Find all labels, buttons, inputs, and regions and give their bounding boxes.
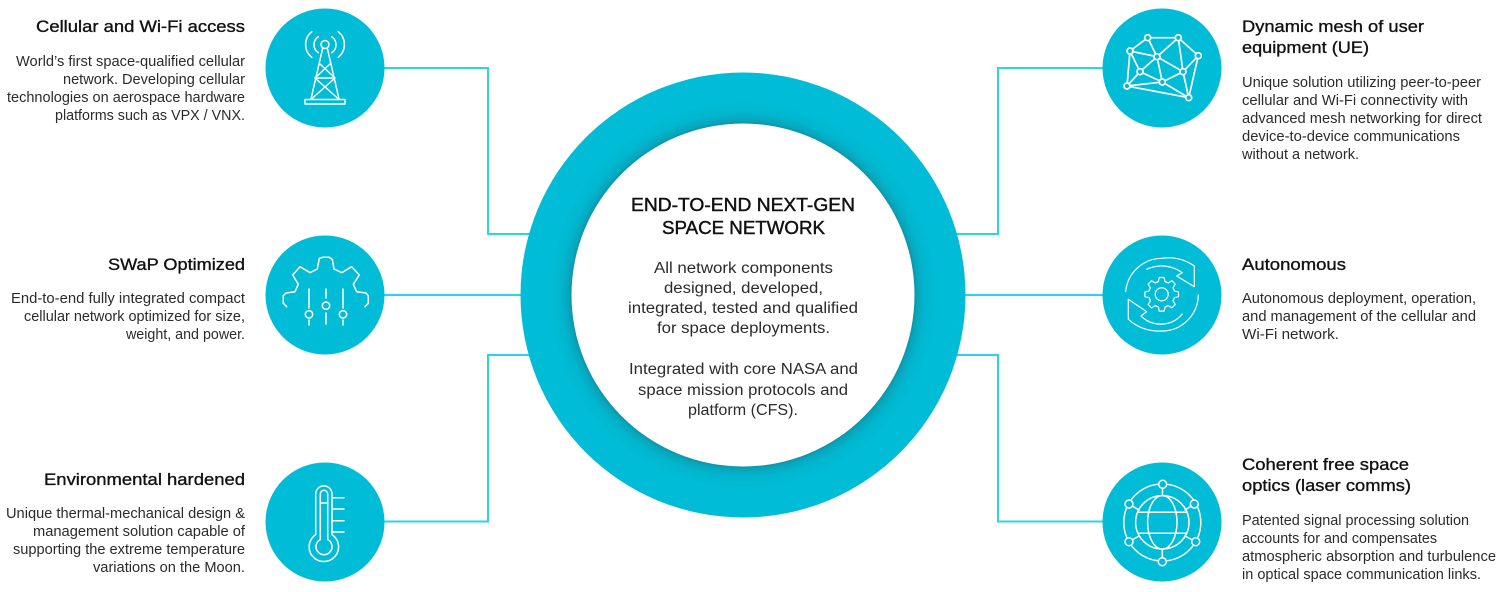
central paragraph 2 <box>629 361 858 419</box>
body: Dynamic mesh: Unique solution utilizing peer-to-peer <box>1242 75 1481 91</box>
body: Dynamic mesh: device-to-device communications <box>1242 129 1460 145</box>
body: Dynamic mesh: advanced mesh networking for direct <box>1242 111 1482 127</box>
body: SWaP Optimized <box>11 291 245 343</box>
central text <box>628 194 858 419</box>
heading: SWaP Optimized: SWaP Optimized <box>108 255 245 274</box>
icon: gear with sliders <box>266 236 384 354</box>
heading: Autonomous: Autonomous <box>1242 255 1346 274</box>
body: Coherent free space optics: Patented signal processing solution <box>1242 513 1469 529</box>
body: Coherent free space optics: atmospheric absorption and turbulence <box>1242 549 1496 565</box>
body: Cellular and Wi-Fi access: platforms such as VPX / VNX. <box>55 108 245 124</box>
heading: Cellular and Wi-Fi access: Cellular and Wi-Fi access <box>36 17 245 36</box>
body: Dynamic mesh: without a network. <box>1241 147 1359 163</box>
icon: cell tower <box>266 8 384 128</box>
icon: thermometer <box>266 462 384 582</box>
icon: mesh network <box>1102 8 1222 128</box>
icon: globe with orbit <box>1102 462 1222 582</box>
body: SWaP Optimized: cellular network optimized for size, <box>24 309 245 325</box>
heading: Dynamic mesh: Dynamic mesh of user <box>1242 17 1424 36</box>
central paragraph 2: space mission protocols and <box>638 382 848 399</box>
panel: Coherent free space optics text <box>1242 455 1496 583</box>
body: Environmental hardened <box>6 506 246 576</box>
body: Autonomous: Wi-Fi network. <box>1242 327 1339 343</box>
body: SWaP Optimized: weight, and power. <box>125 327 245 343</box>
panel: Environmental hardened text <box>6 470 246 576</box>
body: SWaP Optimized: End-to-end fully integrated compact <box>11 291 245 307</box>
body: Coherent free space optics: in optical space communication links. <box>1242 567 1481 583</box>
central heading: SPACE NETWORK <box>662 217 826 238</box>
body: Coherent free space optics <box>1242 513 1496 583</box>
central heading <box>631 194 855 238</box>
icon: cycle arrows with gear <box>1102 236 1222 354</box>
panel: Dynamic mesh text <box>1241 17 1482 163</box>
body: Cellular and Wi-Fi access <box>7 54 245 124</box>
central heading: END-TO-END NEXT-GEN <box>631 194 855 215</box>
central paragraph 1: for space deployments. <box>657 320 830 337</box>
central paragraph 2: Integrated with core NASA and <box>629 361 858 378</box>
heading: Environmental hardened: Environmental hardened <box>44 470 245 489</box>
panel: Cellular and Wi-Fi access text <box>7 17 245 124</box>
heading: Coherent free space optics: Coherent free space <box>1242 455 1409 474</box>
connector lines <box>384 68 1103 522</box>
panel: Autonomous text <box>1242 255 1476 343</box>
body: Environmental hardened: management solution capable of <box>33 524 246 540</box>
central paragraph 2: platform (CFS). <box>688 402 798 419</box>
body: Cellular and Wi-Fi access: World’s first space-qualified cellular <box>16 54 245 70</box>
body: Dynamic mesh: cellular and Wi-Fi connectivity with <box>1242 93 1468 109</box>
central paragraph 1: All network components <box>654 260 833 277</box>
body: Environmental hardened: Unique thermal-mechanical design & <box>6 506 245 522</box>
heading: Dynamic mesh: equipment (UE) <box>1242 38 1369 57</box>
heading: Coherent free space optics: optics (laser comms) <box>1242 476 1411 495</box>
body: Cellular and Wi-Fi access: technologies on aerospace hardware <box>7 90 245 106</box>
heading: Coherent free space optics <box>1242 455 1411 495</box>
body: Autonomous <box>1242 291 1476 343</box>
body: Autonomous: and management of the cellular and <box>1242 309 1476 325</box>
panel: SWaP Optimized text <box>11 255 245 343</box>
body: Environmental hardened: supporting the extreme temperature <box>13 542 245 558</box>
body: Dynamic mesh <box>1241 75 1482 163</box>
central ring <box>520 72 966 518</box>
body: Cellular and Wi-Fi access: network. Developing cellular <box>63 72 245 88</box>
heading: Dynamic mesh <box>1242 17 1424 57</box>
central paragraph 1: integrated, tested and qualified <box>628 300 858 317</box>
body: Coherent free space optics: accounts for and compensates <box>1242 531 1437 547</box>
body: Environmental hardened: variations on the Moon. <box>93 560 245 576</box>
central paragraph 1: designed, developed, <box>664 280 823 297</box>
central paragraph 1 <box>628 260 858 337</box>
body: Autonomous: Autonomous deployment, operation, <box>1242 291 1476 307</box>
